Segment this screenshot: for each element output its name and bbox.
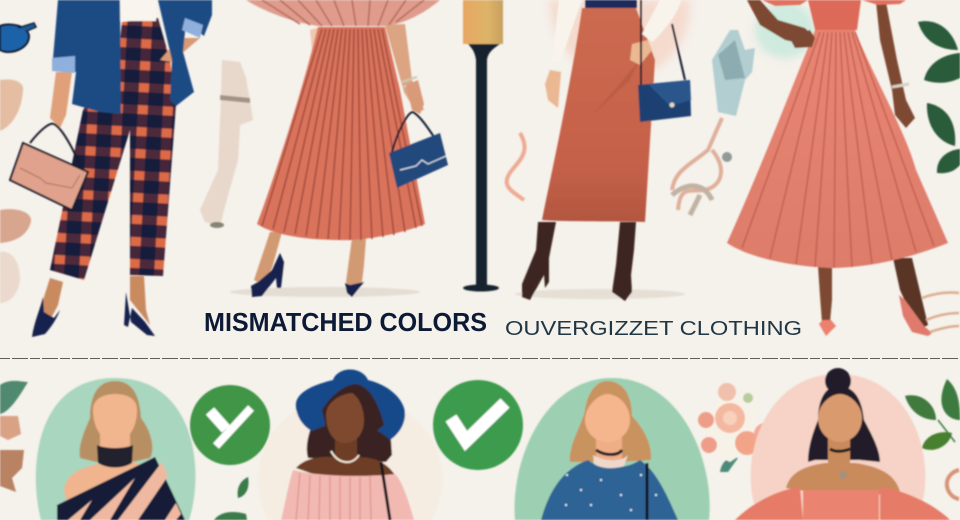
hair <box>80 381 152 462</box>
navy handbag <box>389 112 448 188</box>
ghost garment <box>200 60 253 228</box>
salmon swirl <box>507 133 525 200</box>
sleeves <box>735 487 803 520</box>
pleated ruffle top <box>246 0 440 26</box>
figure: blazer and plaid trousers <box>10 0 212 337</box>
section divider <box>0 358 960 360</box>
figure: navy wide-brim hat <box>258 370 442 520</box>
boots <box>522 222 556 300</box>
illustration group: bottom row <box>0 368 960 520</box>
sparkles <box>565 475 657 510</box>
shoes and legs <box>36 278 63 330</box>
figure: coral flared dress <box>727 0 948 336</box>
hair top <box>322 384 384 445</box>
mint halo <box>755 2 815 58</box>
pink circle <box>751 374 925 520</box>
mint circle <box>515 378 710 520</box>
heading: mismatched colors: MISMATCHED COLORS <box>204 307 487 337</box>
figure: pleated coral skirt <box>230 0 448 297</box>
neck choker <box>97 445 133 468</box>
shoulder ruffles <box>762 0 906 6</box>
figure: coral dress with bun <box>735 368 950 520</box>
leaves right <box>918 21 960 173</box>
rope coil <box>922 293 959 332</box>
mint circle <box>36 378 195 520</box>
face <box>585 394 630 442</box>
bracelet <box>892 84 909 87</box>
shoulders <box>786 463 900 498</box>
bag strap <box>381 462 390 520</box>
neck <box>100 432 130 470</box>
heading: oversized clothing: OUVERGIZZET CLOTHING <box>505 317 802 340</box>
face <box>326 393 364 443</box>
forearm left <box>50 72 72 128</box>
plaid trousers <box>50 18 176 280</box>
bodice <box>803 490 879 520</box>
blazer cuffs <box>52 56 75 73</box>
sweater <box>541 460 678 520</box>
neck <box>335 436 357 460</box>
rose bouquet <box>698 383 776 472</box>
figure: striped off-shoulder top <box>36 378 195 520</box>
ground shadow <box>515 289 685 299</box>
tangled ribbon <box>672 118 732 215</box>
shirt <box>120 0 156 21</box>
striped top <box>57 457 185 520</box>
legs and shoes <box>818 266 832 322</box>
hair <box>570 381 651 462</box>
left arm <box>747 0 815 46</box>
handbag <box>10 124 88 210</box>
right arm <box>876 2 915 128</box>
illustration group: top row <box>0 0 960 337</box>
leaves bottom right <box>905 379 960 450</box>
blazer <box>52 0 121 114</box>
pendant <box>840 471 846 479</box>
figure: blue sparkly sweater <box>515 378 710 520</box>
icon: sunglasses <box>0 23 36 52</box>
white sleeves <box>552 0 582 62</box>
bodice <box>808 0 861 30</box>
sprig <box>214 477 249 520</box>
hair lower <box>307 425 392 462</box>
legs and heels <box>254 232 282 285</box>
teal ghost garment <box>712 30 755 116</box>
hair <box>808 386 880 462</box>
choker <box>830 449 850 451</box>
ground shadow <box>230 287 420 297</box>
figure: rust midi skirt <box>515 0 691 301</box>
face <box>818 394 862 442</box>
salmon halo <box>550 0 690 78</box>
floor lamp <box>463 0 503 292</box>
pink ribbed top <box>281 470 414 520</box>
hand <box>406 80 424 114</box>
flowers left <box>0 381 28 492</box>
copper ring <box>947 470 959 499</box>
bag strap <box>646 463 648 520</box>
icon: green check 2 <box>433 380 523 470</box>
neck <box>596 435 622 460</box>
necklace <box>331 451 359 462</box>
skirt <box>542 8 655 222</box>
bracelets <box>402 77 418 87</box>
navy bag with strap <box>638 0 691 122</box>
hands <box>545 70 561 108</box>
collar and choker <box>593 455 628 468</box>
belt <box>585 0 637 8</box>
skirt <box>257 27 425 240</box>
skirt <box>727 30 948 268</box>
side accessories left <box>0 79 31 303</box>
pale halo <box>258 395 442 520</box>
icon: green check 1 <box>190 385 270 465</box>
hat <box>296 370 405 440</box>
arms <box>385 24 424 112</box>
bun <box>825 368 851 394</box>
shoulder <box>64 460 150 500</box>
shoulders <box>296 457 395 480</box>
face <box>93 394 137 442</box>
neck <box>828 436 850 466</box>
hand on hip <box>788 30 815 48</box>
